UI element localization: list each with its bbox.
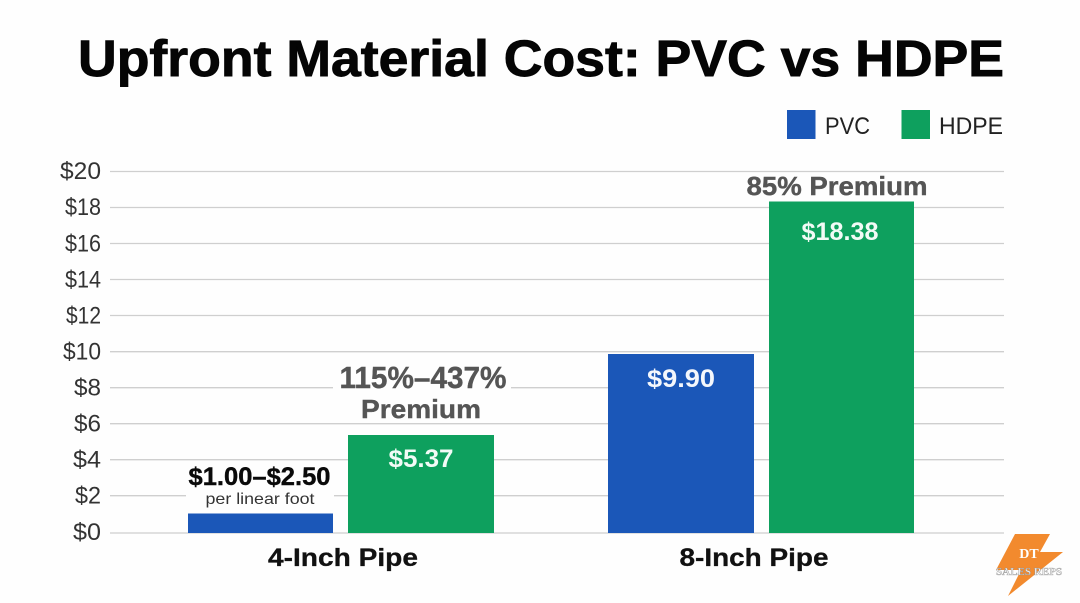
bar: 8-inch PVC [608,354,754,533]
legend label: PVC: PVC [825,113,870,140]
bar: 4-inch HDPE [348,435,494,533]
icon: DT Sales Reps logo: SALES REPS [996,566,1062,578]
value label: 18.38: $18.38 [802,218,879,246]
callout: 4-inch premium: Premium [361,394,481,424]
callout: 4-inch premium: 115%–437% [340,360,506,395]
legend label: HDPE: HDPE [939,113,1003,140]
icon: DT Sales Reps logo [996,534,1063,596]
icon: DT Sales Reps logo: DT [1019,547,1039,562]
callout: 4-inch PVC price: per linear foot [206,491,315,508]
value label: 9.90: $9.90 [647,365,715,393]
callout: 8-inch premium: 85% Premium [746,171,928,201]
y axis labels: $12 [66,302,101,330]
legend [787,110,1003,140]
bar: 8-inch HDPE [769,202,914,533]
callout: 4-inch premium [333,360,511,424]
y axis labels: $10 [63,338,101,366]
category label: 4-inch: 4-Inch Pipe [268,544,418,572]
y axis labels: $4 [73,446,101,474]
y axis labels: $14 [65,266,101,294]
category label: 8-inch: 8-Inch Pipe [680,544,829,572]
callout: 4-inch PVC price: $1.00–$2.50 [188,463,330,491]
title: Upfront Material Cost: PVC vs HDPE [78,30,1004,87]
legend swatch: HDPE [902,110,930,139]
y axis labels: $2 [75,482,101,510]
value label: 5.37: $5.37 [388,445,454,473]
bar: 4-inch PVC [188,514,333,533]
y axis labels: $18 [65,194,101,221]
y axis labels [60,158,101,546]
callout: 4-inch PVC price [186,462,334,513]
y axis labels: $16 [65,230,101,258]
y axis labels: $20 [60,158,101,185]
y axis labels: $8 [74,374,101,402]
y axis labels: $0 [73,519,101,546]
y axis labels: $6 [74,410,101,438]
legend swatch: PVC [787,110,816,139]
